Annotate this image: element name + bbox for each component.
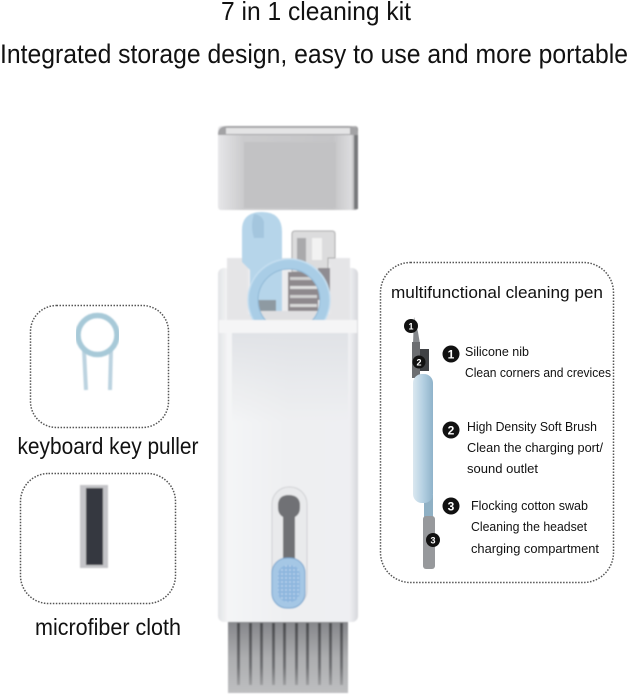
number badges [404,319,440,547]
callout: soft brush: Clean the charging port/ [467,440,603,455]
label: keyboard key puller: keyboard key puller [18,433,199,459]
icon: microfiber cloth [80,485,108,568]
pen diagram [404,317,440,569]
callout: cotton swab: Cleaning the headset [471,519,587,534]
tray [227,258,350,320]
callout: cotton swab: charging compartment [471,541,599,556]
callout: silicone nib: 1 [448,348,455,362]
label: microfiber cloth: microfiber cloth [35,614,181,640]
blue pen top [242,212,282,316]
ledge [252,311,324,320]
product: brush bristles [228,622,348,693]
panel heading: multifunctional cleaning pen [391,283,603,302]
callout: soft brush: High Density Soft Brush [467,419,597,434]
icon: key puller [78,316,117,390]
callout: cotton swab: 3 [448,500,455,514]
clear swab holder [292,231,335,272]
callout: silicone nib: Silicone nib [465,344,529,359]
panel: microfiber cloth [20,474,176,604]
callout: silicone nib [442,344,611,380]
number badges: 3 [430,536,436,546]
callout: cotton swab [442,498,599,556]
callout: soft brush [442,419,603,476]
number badges: 2 [416,358,422,368]
panel: key puller [30,306,168,428]
callout: soft brush: 2 [448,424,455,438]
cotton spool [288,272,318,312]
callout: cotton swab: Flocking cotton swab [471,498,588,513]
number badges: 1 [408,322,414,332]
callout: silicone nib: Clean corners and crevices [465,365,611,380]
product: storage lid [218,126,358,210]
blue ring [247,258,331,320]
panel: multifunctional cleaning pen [380,262,614,582]
product: pen and tools in tray [218,212,358,622]
product: slider [272,487,307,608]
tray front [219,320,357,333]
callout: soft brush: sound outlet [467,461,538,476]
